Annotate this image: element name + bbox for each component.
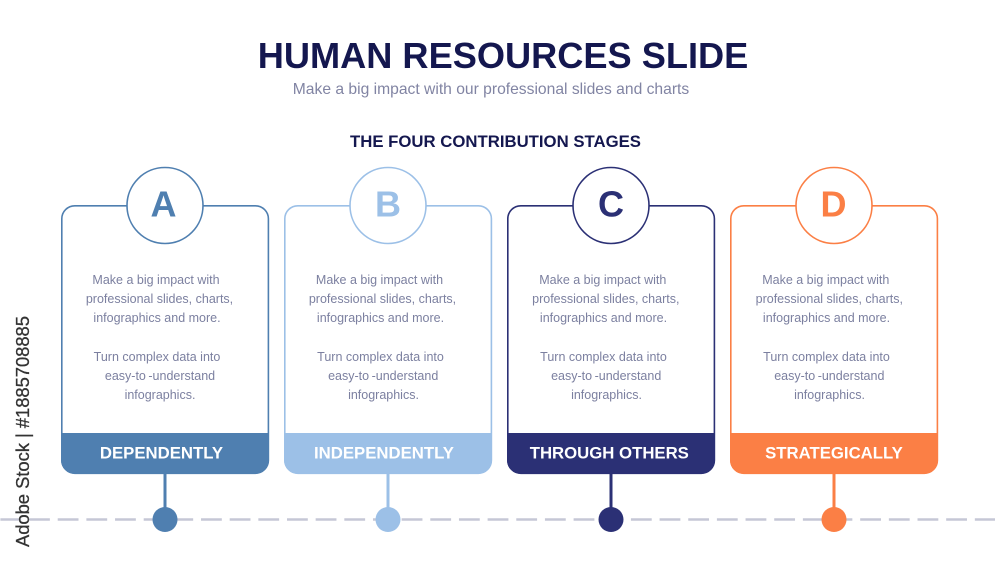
body text A: professional slides, charts,	[86, 292, 233, 306]
body text A: infographics and more.	[93, 311, 221, 325]
connector C	[610, 474, 612, 519]
body text D: infographics.	[794, 388, 865, 402]
connector B	[386, 474, 390, 519]
body text C: easy-to-understand	[551, 369, 661, 383]
body text A: easy-to-understand	[105, 369, 215, 383]
card outline C	[508, 206, 714, 473]
connector A	[164, 474, 166, 519]
letter C: C	[598, 184, 624, 224]
body text B	[309, 273, 456, 402]
letter circle A	[127, 168, 203, 244]
subtitle: Make a big impact with our professional slides and charts	[293, 81, 689, 98]
title: HUMAN RESOURCES SLIDE	[258, 35, 748, 76]
band label C: THROUGH OTHERS	[530, 444, 689, 462]
body text B: easy-to-understand	[328, 369, 438, 383]
side stock credit: Adobe Stock | #1885708885	[12, 316, 33, 547]
timeline dot C	[598, 507, 624, 532]
label band D	[730, 433, 938, 474]
panel: stage B	[284, 168, 492, 532]
body text D: professional slides, charts,	[756, 292, 903, 306]
timeline dot D	[822, 507, 846, 532]
body text D: easy-to-understand	[774, 369, 884, 383]
letter D: D	[820, 184, 846, 224]
band label A: DEPENDENTLY	[100, 444, 223, 462]
body text B: infographics and more.	[317, 311, 444, 325]
body text A: Make a big impact with	[92, 273, 220, 287]
body text B: Turn complex data into	[317, 350, 444, 364]
body text D	[756, 273, 903, 402]
body text C: Make a big impact with	[539, 273, 666, 287]
band label D: STRATEGICALLY	[765, 444, 903, 462]
label band C	[507, 433, 715, 474]
section heading: THE FOUR CONTRIBUTION STAGES	[350, 132, 641, 151]
body text D: infographics and more.	[763, 311, 890, 325]
letter circle D	[796, 168, 872, 244]
body text A: infographics.	[125, 388, 195, 402]
body text B: professional slides, charts,	[309, 292, 456, 306]
letter B: B	[375, 184, 401, 224]
letter circle C	[573, 168, 649, 244]
body text B: infographics.	[348, 388, 419, 402]
letter circle B	[350, 168, 426, 244]
body text B: Make a big impact with	[316, 273, 443, 287]
body text C: infographics.	[571, 388, 642, 402]
timeline dashed line	[0, 518, 995, 521]
body text A	[86, 273, 233, 402]
connector D	[832, 474, 836, 519]
body text C: Turn complex data into	[540, 350, 667, 364]
card outline A	[62, 206, 268, 473]
label band B	[284, 433, 492, 474]
body text C: professional slides, charts,	[532, 292, 679, 306]
band label B: INDEPENDENTLY	[314, 444, 454, 462]
card outline B	[285, 206, 491, 473]
body text C: infographics and more.	[540, 311, 667, 325]
body text D: Make a big impact with	[762, 273, 889, 287]
panel: stage D	[730, 168, 938, 532]
letter A: A	[150, 184, 176, 224]
timeline dot B	[376, 507, 400, 532]
panel: stage C	[507, 168, 715, 532]
body text C	[532, 273, 679, 402]
body text D: Turn complex data into	[763, 350, 890, 364]
panel: stage A	[61, 168, 269, 532]
card outline D	[731, 206, 937, 473]
label band A	[61, 433, 269, 474]
timeline dot A	[152, 507, 178, 532]
body text A: Turn complex data into	[94, 350, 220, 364]
